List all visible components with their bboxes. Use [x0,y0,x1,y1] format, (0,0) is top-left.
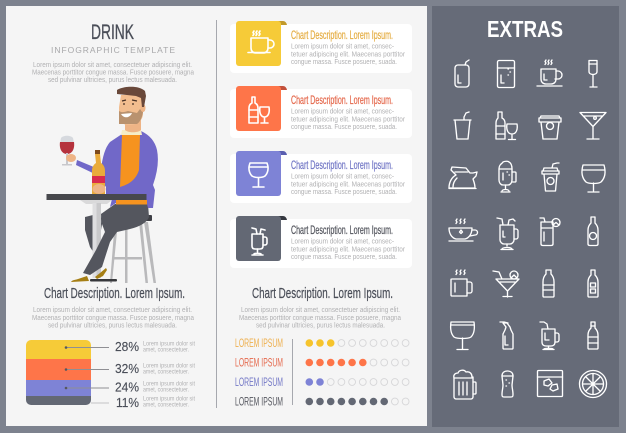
icon: kettle [449,167,477,188]
back leg [85,213,102,253]
rating row 1: LOREM IPSUM [235,338,283,350]
icon: cocktail with lemon [493,271,519,297]
card title: Chart Description. Lorem Ipsum. [291,158,393,172]
icon: takeaway with straw [542,163,559,191]
intro text [32,62,194,84]
icon: water bottle [543,270,554,297]
collar [121,130,142,135]
panel: main light sheet [6,6,427,426]
table leg and base [80,200,117,282]
card text: tetuer adipiscing elit. Maecenas porttitor [291,180,406,188]
rating row 2: LOREM IPSUM [235,358,283,370]
chart values and captions: amet, consectetuer. [143,370,189,376]
text block: left chart: Maecenas porttitor congue massa. Fusce posuere, magna [32,315,194,322]
chart values and captions: 32% [115,361,139,376]
wine glass [60,136,74,166]
ear [140,104,146,112]
icon: can [455,60,469,87]
panel: extras [432,6,619,427]
icon: mulled glass mug [252,228,267,255]
text block: right chart: Lorem ipsum dolor sit amet, consectetuer adipiscing elit. [241,307,400,314]
chart values and captions: 24% [115,380,139,394]
icon: mulled glass [497,218,518,250]
subtitle: INFOGRAPHIC TEMPLATE [51,45,175,55]
card text: congue massa. Fusce posuere, suada. [291,252,397,261]
shirt hem [116,200,147,204]
rating row 2 [235,358,409,370]
card title: Chart Description. Lorem Ipsum. [291,93,393,107]
card text [291,172,406,196]
eyes [122,100,137,104]
shirt [120,135,140,187]
icon: labelled bottle [588,270,598,297]
card text: congue massa. Fusce posuere, suada. [291,57,397,66]
card text: congue massa. Fusce posuere, suada. [291,187,397,196]
card text: Lorem ipsum dolor sit amet, consec- [291,42,395,50]
rating row 3 [235,377,409,389]
icon: whisky glass [538,370,562,396]
chart values and captions: amet, consectetuer. [143,388,189,394]
rating row 4: LOREM IPSUM [235,396,283,408]
card text: congue massa. Fusce posuere, suada. [291,122,397,131]
rating row 1 [235,338,409,350]
icon: long drink with lemon [540,218,560,246]
hair [117,87,146,107]
text block: left chart: sed pulvinar ultricies, purus lectus malesuada. [48,322,177,330]
card text [291,42,406,66]
chart values and captions: 11% [116,395,139,410]
card text [291,236,406,261]
chart values and captions: Lorem ipsum dolor sit [143,342,195,348]
beard [119,109,143,124]
icon: goblet [249,163,268,187]
rating row 4 [235,396,409,408]
icon: mug with straw [540,322,559,350]
card text: tetuer adipiscing elit. Maecenas porttitor [291,244,406,254]
hand holding glass [66,154,76,162]
front leg [83,204,149,275]
card text: tetuer adipiscing elit. Maecenas porttitor [291,114,406,124]
chart values and captions: amet, consectetuer. [143,402,189,408]
card: goblet [230,151,412,203]
intro text: sed pulvinar ultricies, purus lectus malesuada. [48,77,177,84]
icon: coffee cup [248,31,274,53]
icon: mug with steam [451,270,472,296]
icon: beer mug [454,370,476,399]
icon: saucer cup [449,219,478,241]
icon: tall glass [498,60,514,88]
mouth [121,113,132,117]
extras title: EXTRAS [487,16,563,42]
icon: champagne bottle [588,322,598,349]
card text: Lorem ipsum dolor sit amet, consec- [291,236,395,246]
chart values and captions: Lorem ipsum dolor sit [143,382,195,388]
bottle [92,150,105,194]
face [119,95,143,125]
neck [125,118,141,132]
dot rating chart [235,338,409,408]
icon: beer bottle [588,217,598,246]
text block: left chart: Lorem ipsum dolor sit amet, consectetuer adipiscing elit. [33,307,192,314]
rating row 3: LOREM IPSUM [235,377,283,389]
title: DRINK [91,21,134,44]
text block: right chart: sed pulvinar ultricies, purus lectus malesuada. [256,322,385,330]
card: mulled drink [230,216,412,268]
stool [110,215,156,283]
heading: right chart: Chart Description. Lorem Ipsum. [252,285,393,302]
heading: left chart: Chart Description. Lorem Ipsum. [44,285,185,302]
icon: flute [589,60,597,87]
chart values and captions: amet, consectetuer. [143,348,189,354]
table top [46,194,146,200]
icon: bottle with straw [500,322,513,349]
chart values and captions: 28% [115,339,139,354]
icon: bottle and glass [249,97,269,123]
jumper [76,131,158,208]
card text [291,106,406,131]
chart values and captions: Lorem ipsum dolor sit [143,364,195,370]
text block: right chart [239,307,401,330]
text block: right chart: Maecenas porttitor congue massa. Fusce posuere, magna [239,315,401,322]
card title: Chart Description. Lorem Ipsum. [291,28,393,42]
icon: cup with straw [454,112,471,139]
intro text: Lorem ipsum dolor sit amet, consectetuer adipiscing elit. [33,62,192,69]
icon: large wine glass [582,165,605,192]
icon: citrus slice [580,370,606,398]
text block: left chart [32,307,194,330]
card: wine [230,86,412,138]
icon: tall beer glass [502,371,513,397]
card: coffee [230,21,412,73]
icon: latte glass [499,161,516,192]
chart values and captions: Lorem ipsum dolor sit [143,396,195,402]
icon: martini [580,112,606,139]
illustration: seated man with wine and bottle [46,87,158,283]
stacked bar chart [26,340,109,405]
shoes [71,268,107,282]
chart values and captions [115,339,195,410]
card text: Lorem ipsum dolor sit amet, consec- [291,106,395,116]
card text: tetuer adipiscing elit. Maecenas porttitor [291,50,406,58]
hand on bottle [92,184,106,194]
card text: Lorem ipsum dolor sit amet, consec- [291,172,395,180]
intro text: Maecenas porttitor congue massa. Fusce posuere, magna [32,70,194,76]
icon: takeaway cup [539,116,561,139]
card title: Chart Description. Lorem Ipsum. [291,223,393,237]
icon: bottle and wineglass [496,112,517,140]
icon: wide wine glass [451,322,474,350]
icon: tea cup [537,60,562,86]
